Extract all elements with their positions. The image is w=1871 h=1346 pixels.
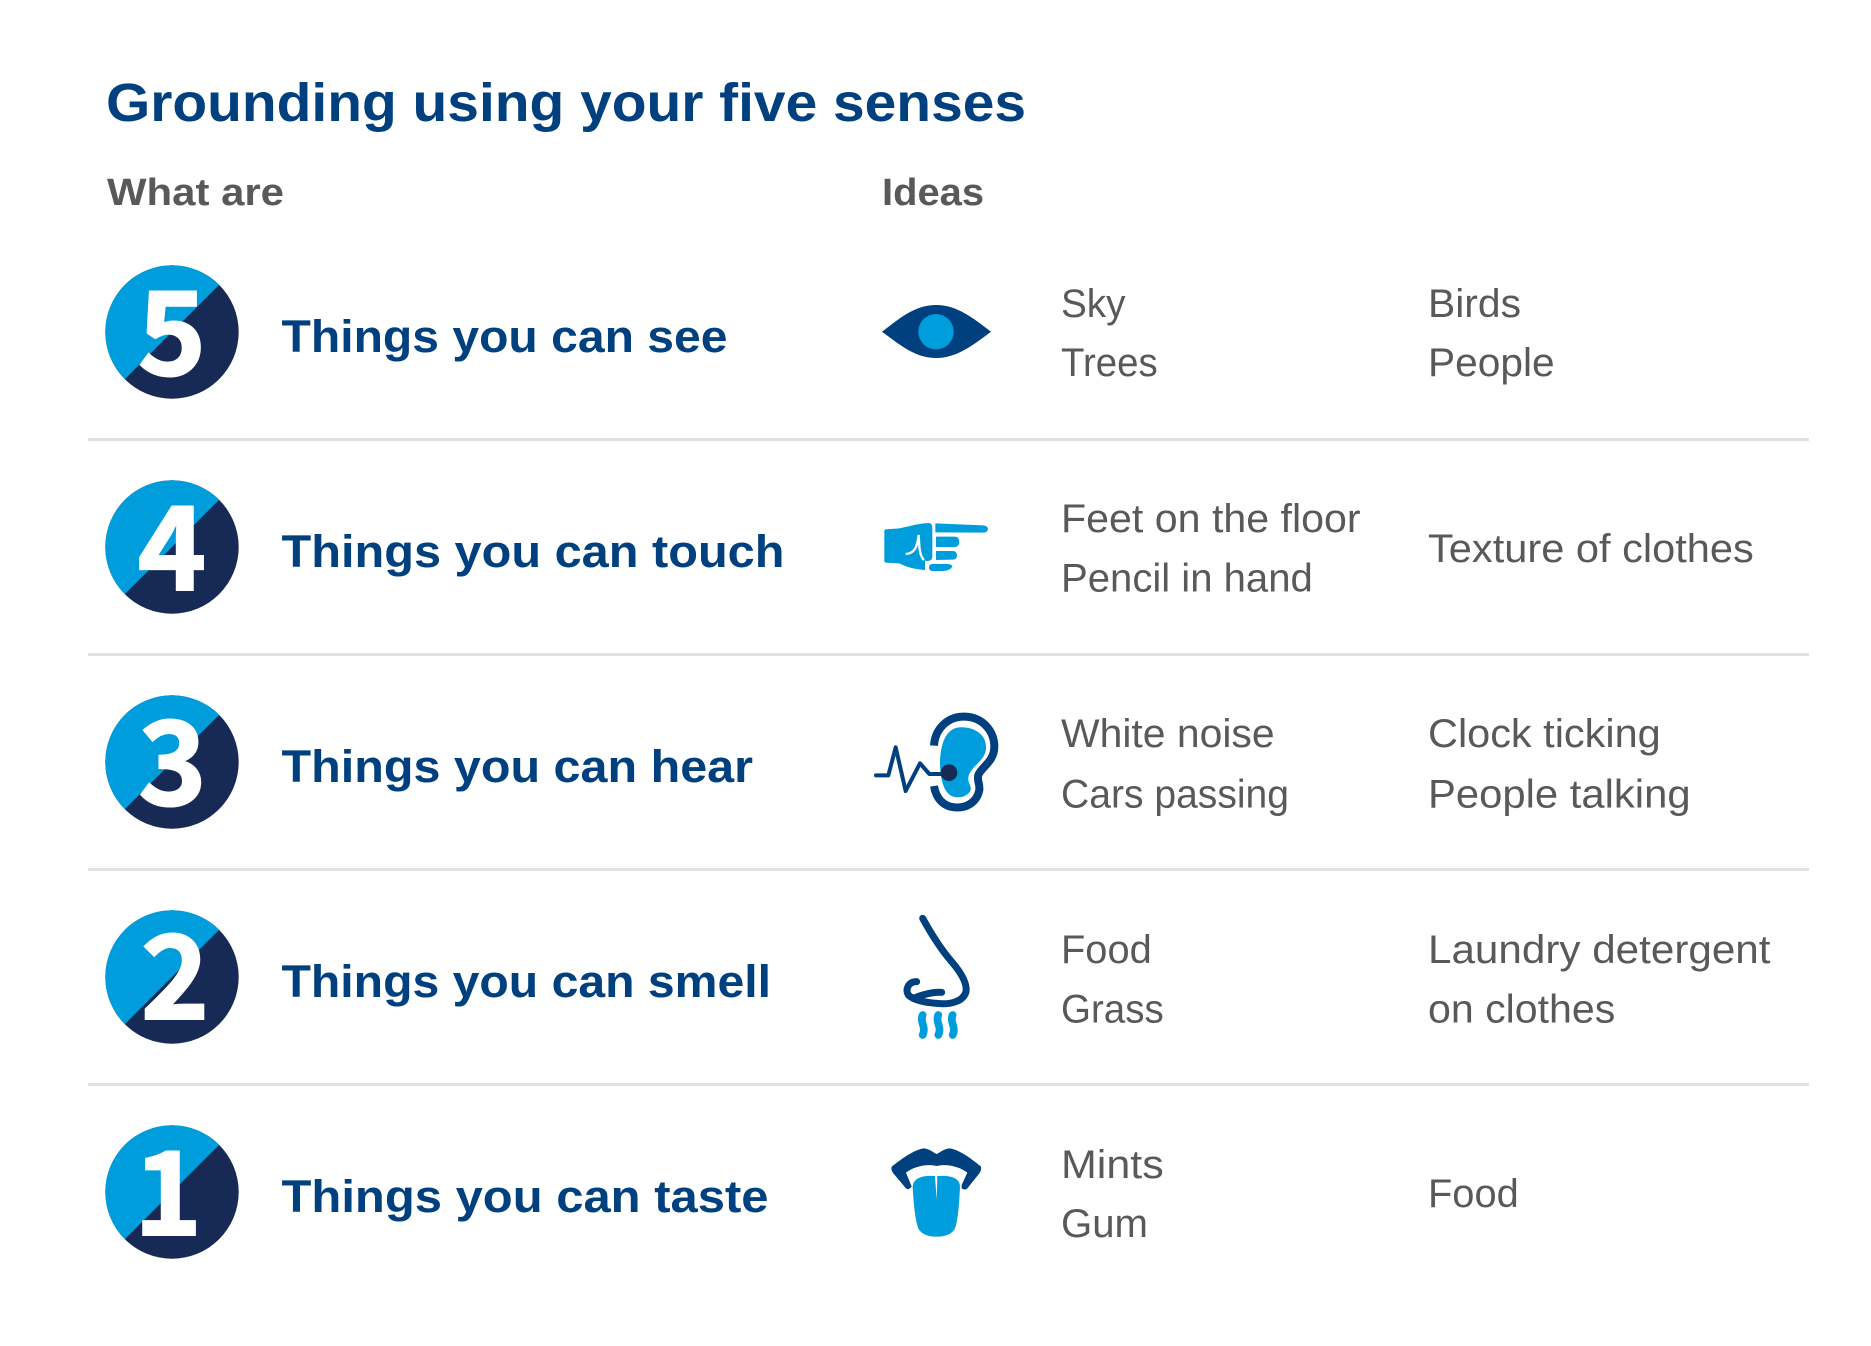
- ideas: smell: on clothes: [1428, 988, 1615, 1032]
- row: 4 things you can touch: [105, 456, 1754, 624]
- ideas: touch: Feet on the floor: [1061, 497, 1361, 541]
- ideas: smell: [1061, 928, 1770, 1032]
- ideas: hear: White noise: [1061, 712, 1275, 756]
- number badge 4: [105, 456, 239, 624]
- row: 1 thing you can taste: [105, 1101, 1519, 1269]
- number badge 2: 2: [141, 885, 209, 1053]
- ideas: taste: Gum: [1061, 1202, 1148, 1246]
- ideas: hear: People talking: [1428, 772, 1691, 816]
- number badge 5: 5: [138, 241, 206, 409]
- ideas: hear: Cars passing: [1061, 772, 1289, 816]
- number badge 4: 4: [138, 456, 206, 624]
- number badge 2: [105, 885, 239, 1053]
- number badge 5: [105, 241, 239, 409]
- icon: ear with sound wave: [876, 717, 994, 807]
- ideas: see: Birds: [1428, 282, 1521, 326]
- ideas: see: [1061, 282, 1555, 385]
- ideas: touch: Pencil in hand: [1061, 556, 1313, 600]
- row: 2 things you can smell: [105, 885, 1771, 1053]
- ideas: taste: [1061, 1143, 1519, 1246]
- ideas: see: Sky: [1061, 282, 1126, 326]
- ideas: see: Trees: [1061, 341, 1158, 385]
- ideas: hear: [1061, 712, 1691, 816]
- label: things you can hear: Things you can hear: [282, 741, 753, 792]
- row: 5 things you can see: [105, 241, 1555, 409]
- ideas: touch: [1061, 497, 1754, 600]
- ideas: taste: Mints: [1061, 1143, 1164, 1187]
- icon: nose: [907, 918, 966, 1035]
- ideas: smell: Food: [1061, 928, 1152, 972]
- row: 3 things you can hear: [105, 671, 1691, 839]
- number badge 3: 3: [138, 671, 207, 839]
- icon: pointing hand: [884, 523, 988, 571]
- label: things you can taste: Things you can taste: [282, 1171, 768, 1222]
- ideas: smell: Laundry detergent: [1428, 928, 1770, 972]
- ideas: taste: Food: [1428, 1172, 1519, 1216]
- ideas: see: People: [1428, 341, 1555, 385]
- number badge 3: [105, 671, 239, 839]
- label: things you can touch: Things you can touch: [282, 526, 784, 577]
- ideas: hear: Clock ticking: [1428, 712, 1661, 756]
- number badge 1: [105, 1101, 239, 1269]
- ideas: smell: Grass: [1061, 988, 1164, 1032]
- icon: mouth and tongue: [891, 1148, 981, 1237]
- icon: eye: [882, 305, 991, 358]
- number badge 1: 1: [134, 1101, 202, 1269]
- title: Grounding using your five senses: [106, 73, 1026, 133]
- ideas: touch: Texture of clothes: [1428, 527, 1754, 571]
- column heading: what are: What are: [107, 172, 284, 214]
- label: things you can see: Things you can see: [282, 311, 728, 362]
- column heading: ideas: Ideas: [882, 172, 984, 214]
- label: things you can smell: Things you can smell: [282, 956, 771, 1007]
